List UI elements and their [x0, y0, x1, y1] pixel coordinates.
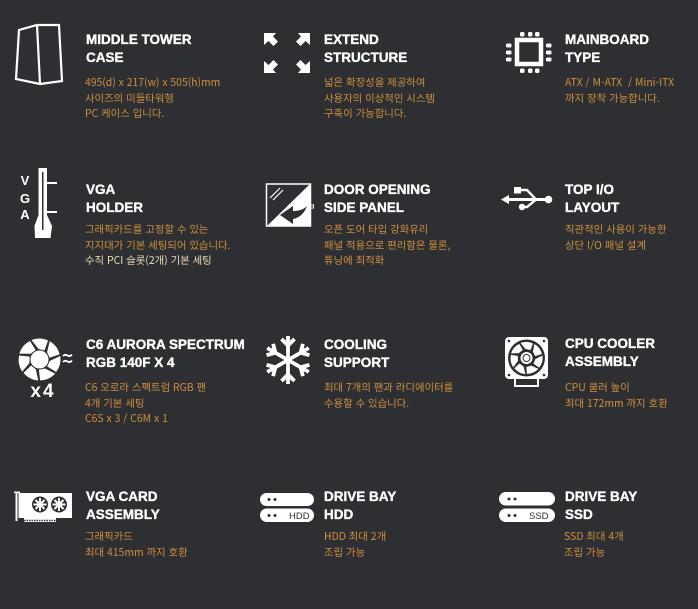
icon: chip — [506, 32, 552, 73]
text: cooler description: 최대 172mm 까지 호환 — [565, 395, 668, 410]
text: expandability — [324, 74, 435, 120]
text: fan description — [85, 379, 206, 425]
icon: hdd bays: HDD — [289, 511, 310, 522]
panel: cpu cooler assembly — [505, 336, 668, 410]
heading: cpu cooler assembly: CPU COOLER — [565, 336, 655, 351]
heading: c6 aurora spectrum — [86, 337, 245, 370]
heading: middle tower case: CASE — [86, 50, 124, 65]
text: door description: 패널 적용으로 편리함은 물론, — [324, 237, 450, 252]
heading: vga card assembly — [86, 489, 160, 522]
heading: drive bay hdd — [324, 488, 396, 524]
heading: vga holder: HOLDER — [86, 200, 143, 215]
heading: drive bay ssd — [565, 488, 637, 524]
panel: vga card assembly — [14, 489, 188, 559]
icon: ssd bays — [499, 480, 559, 530]
text: cooler description: CPU 쿨러 높이 — [565, 379, 630, 394]
text: ssd description — [564, 528, 624, 559]
text: expandability: 넓은 확장성을 제공하여 — [324, 74, 425, 89]
heading: drive bay ssd: SSD — [565, 507, 593, 522]
text: fan description: 4개 기본 세팅 — [85, 395, 144, 410]
text: io description — [565, 221, 666, 252]
text: cooling description — [324, 379, 453, 410]
heading: cooling support: COOLING — [324, 337, 387, 352]
heading: extend structure: STRUCTURE — [324, 50, 407, 65]
heading: mainboard type: MAINBOARD — [565, 32, 649, 47]
panel: mainboard type — [506, 32, 674, 105]
panel: extend structure — [264, 32, 435, 120]
text: door description — [324, 221, 450, 267]
heading: vga card assembly: ASSEMBLY — [86, 507, 160, 522]
text: holder description: 그래픽카드를 고정할 수 있는 — [85, 221, 208, 236]
icon: vga holder: G — [20, 191, 30, 206]
heading: extend structure — [324, 32, 407, 65]
heading: mainboard type: TYPE — [565, 50, 600, 65]
heading: vga holder: VGA — [86, 182, 115, 197]
text: door description: 튜닝에 최적화 — [324, 252, 384, 267]
heading: c6 aurora spectrum: RGB 140F X 4 — [86, 355, 175, 370]
icon: expand arrows — [264, 33, 310, 73]
panel: vga holder — [20, 168, 230, 267]
heading: drive bay ssd: DRIVE BAY — [565, 489, 637, 504]
text: hdd description: 조립 가능 — [324, 544, 365, 559]
heading: cooling support — [324, 337, 390, 370]
text: expandability: 사용자의 이상적인 시스템 — [324, 90, 435, 105]
heading: vga holder — [86, 182, 143, 215]
heading: cpu cooler assembly: ASSEMBLY — [565, 354, 639, 369]
heading: top io layout: TOP I/O — [565, 182, 614, 197]
icon: ssd bays: SSD — [529, 511, 549, 522]
text: case size: PC 케이스 입니다. — [85, 105, 164, 120]
heading: extend structure: EXTEND — [324, 32, 379, 47]
heading: top io layout: LAYOUT — [565, 200, 619, 215]
text: holder description: 지지대가 기본 세팅되어 있습니다. — [85, 237, 230, 252]
text: board sizes: ATX / M-ATX / Mini-ITX — [565, 74, 674, 89]
text: vga card description: 그래픽카드 — [85, 528, 133, 543]
text: holder description: 수직 PCI 슬롯(2개) 기본 세팅 — [85, 252, 212, 267]
text: cooling description: 수용할 수 있습니다. — [324, 395, 409, 410]
text: case size — [85, 74, 220, 120]
icon: vga holder: V — [21, 173, 30, 188]
panel: drive bay ssd — [499, 480, 689, 570]
text: cooling description: 최대 7개의 팬과 라디에이터를 — [324, 379, 453, 394]
panel: cooling support — [266, 336, 453, 410]
text: board sizes: 까지 장착 가능합니다. — [565, 90, 660, 105]
panel: c6 aurora fans — [18, 337, 245, 425]
text: hdd description: HDD 최대 2개 — [324, 528, 386, 543]
text: vga card description: 최대 415mm 까지 호환 — [85, 544, 188, 559]
text: ssd description: 조립 가능 — [564, 544, 605, 559]
icon: cpu cooler — [505, 337, 548, 387]
icon: usb symbol — [501, 187, 552, 210]
text: holder description — [85, 221, 230, 267]
heading: drive bay hdd: DRIVE BAY — [324, 489, 396, 504]
text: vga card description — [85, 528, 188, 559]
panel: drive bay hdd — [260, 480, 450, 570]
icon: fan x4 — [18, 338, 73, 402]
icon: vga holder: A — [20, 207, 30, 222]
text: case size: 495(d) x 217(w) x 505(h)mm — [85, 74, 220, 89]
text: io description: 상단 I/O 패널 설계 — [565, 237, 646, 252]
heading: drive bay hdd: HDD — [324, 507, 353, 522]
panel: middle tower case — [14, 24, 220, 120]
text: fan description: C6 오로라 스펙트럼 RGB 팬 — [85, 379, 206, 394]
panel: door opening side panel — [266, 182, 450, 267]
text: ssd description: SSD 최대 4개 — [564, 528, 624, 543]
text: case size: 사이즈의 미들타워형 — [85, 90, 174, 105]
heading: cpu cooler assembly — [565, 336, 655, 369]
icon: hdd bays — [260, 480, 320, 530]
heading: c6 aurora spectrum: C6 AURORA SPECTRUM — [86, 337, 245, 352]
heading: door opening side panel — [324, 182, 431, 215]
heading: top io layout — [564, 182, 620, 215]
heading: cooling support: SUPPORT — [324, 355, 389, 370]
panel: top io layout — [501, 182, 666, 252]
heading: door opening side panel: DOOR OPENING — [324, 182, 431, 197]
icon: snowflake — [266, 336, 310, 384]
icon: vga holder — [20, 168, 57, 238]
text: fan description: C6S x 3 / C6M x 1 — [85, 410, 168, 425]
text: hdd description — [324, 528, 386, 559]
heading: mainboard type — [564, 32, 649, 65]
heading: middle tower case: MIDDLE TOWER — [86, 32, 192, 47]
heading: vga card assembly: VGA CARD — [86, 489, 158, 504]
text: board sizes — [565, 74, 674, 105]
icon: door with arrow — [266, 183, 314, 227]
text: cooler description — [565, 379, 668, 410]
text: io description: 직관적인 사용이 가능한 — [565, 221, 666, 236]
text: expandability: 구축이 가능합니다. — [324, 105, 406, 120]
heading: door opening side panel: SIDE PANEL — [324, 200, 404, 215]
heading: middle tower case — [86, 32, 192, 65]
text: door description: 오픈 도어 타입 강화유리 — [324, 221, 428, 236]
icon: tower case — [14, 24, 64, 86]
icon: fan x4: x4 — [30, 381, 56, 402]
icon: graphics card — [14, 492, 72, 522]
